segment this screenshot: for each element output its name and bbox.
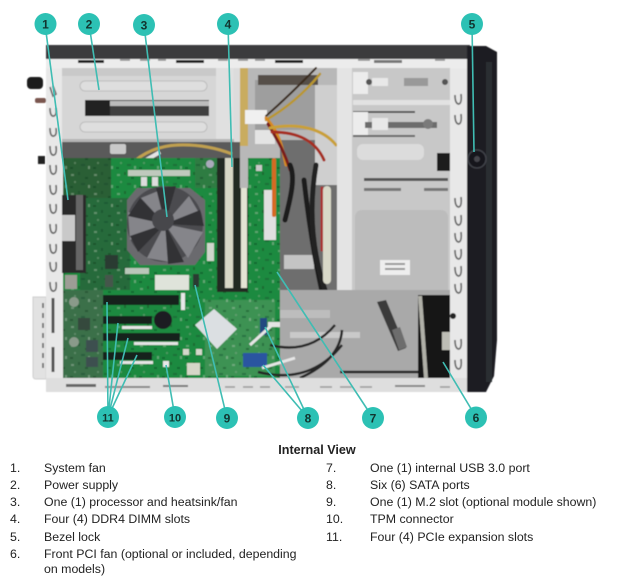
power supply cage — [62, 68, 234, 142]
DIMM slots — [217, 158, 248, 292]
legend left column: on models) — [44, 562, 105, 576]
heatsink and fan — [127, 186, 205, 265]
callout 9: 9 — [224, 412, 231, 426]
legend left column: 1. — [10, 461, 20, 475]
legend left column: 3. — [10, 495, 20, 509]
legend left column — [10, 461, 297, 576]
legend right column: 8. — [326, 478, 336, 492]
lower drive bay — [250, 290, 450, 378]
legend left column: 4. — [10, 512, 20, 526]
callout 11 — [97, 406, 119, 428]
callout 4 — [217, 13, 239, 35]
legend right column: 7. — [326, 461, 336, 475]
right perforated strip — [450, 68, 468, 378]
legend left column: System fan — [44, 461, 106, 475]
legend right column: 9. — [326, 495, 336, 509]
system fan — [62, 195, 86, 289]
legend right column: One (1) internal USB 3.0 port — [370, 461, 530, 475]
legend left column: Power supply — [44, 478, 119, 492]
callout 5: 5 — [469, 18, 476, 32]
legend left column: One (1) processor and heatsink/fan — [44, 495, 238, 509]
motherboard — [63, 158, 280, 378]
PCIe slots — [103, 293, 185, 364]
power cables — [266, 68, 336, 300]
callout 11: 11 — [102, 412, 114, 424]
legend right column: TPM connector — [370, 512, 454, 526]
callout 6: 6 — [473, 411, 480, 425]
legend right column: Four (4) PCIe expansion slots — [370, 530, 533, 544]
callout 2 — [78, 13, 100, 35]
title: Internal View — [278, 443, 356, 457]
legend left column: 5. — [10, 530, 20, 544]
callout 10 — [164, 406, 186, 428]
legend right column: Six (6) SATA ports — [370, 478, 470, 492]
callout 2: 2 — [86, 18, 93, 32]
callout 7: 7 — [370, 412, 377, 426]
top perforated strip — [46, 59, 468, 68]
top black panel — [46, 45, 470, 59]
legend left column: Bezel lock — [44, 530, 101, 544]
callout 8: 8 — [305, 412, 312, 426]
legend left column: 2. — [10, 478, 20, 492]
front PCI fan — [418, 295, 450, 378]
legend right column: 10. — [326, 512, 343, 526]
bottom rail — [46, 378, 468, 392]
coin battery connector — [154, 311, 172, 329]
blue SATA ports — [243, 318, 280, 367]
chassis metal base — [46, 58, 468, 392]
callout 10: 10 — [169, 412, 181, 424]
callout 9 — [216, 407, 238, 429]
legend right column: 11. — [326, 530, 342, 544]
callout 1 — [34, 13, 56, 35]
legend left column: 6. — [10, 547, 20, 561]
callout 4: 4 — [225, 18, 232, 32]
callout 8 — [297, 407, 319, 429]
leader lines — [45, 24, 476, 418]
callout 7 — [362, 407, 384, 429]
callout 6 — [465, 406, 487, 428]
legend left column: Front PCI fan (optional or included, depending — [44, 547, 297, 561]
M.2 module — [155, 274, 199, 290]
left frame with hooks — [43, 68, 63, 378]
white chip label — [195, 309, 237, 349]
legend right column: One (1) M.2 slot (optional module shown) — [370, 495, 596, 509]
cable channel under power supply — [62, 142, 240, 168]
callout 1: 1 — [42, 18, 49, 32]
front black bezel — [467, 46, 497, 392]
TPM and small connectors — [163, 349, 202, 375]
callout 3 — [133, 14, 155, 36]
drive cage — [337, 68, 459, 295]
lock knob and side studs — [27, 77, 46, 164]
callout 3: 3 — [141, 18, 148, 32]
legend left column: Four (4) DDR4 DIMM slots — [44, 512, 190, 526]
left side bracket — [33, 297, 46, 379]
cable bay — [240, 68, 337, 295]
legend right column — [326, 461, 596, 544]
server chassis photo — [27, 45, 497, 392]
callout 5 — [461, 13, 483, 35]
